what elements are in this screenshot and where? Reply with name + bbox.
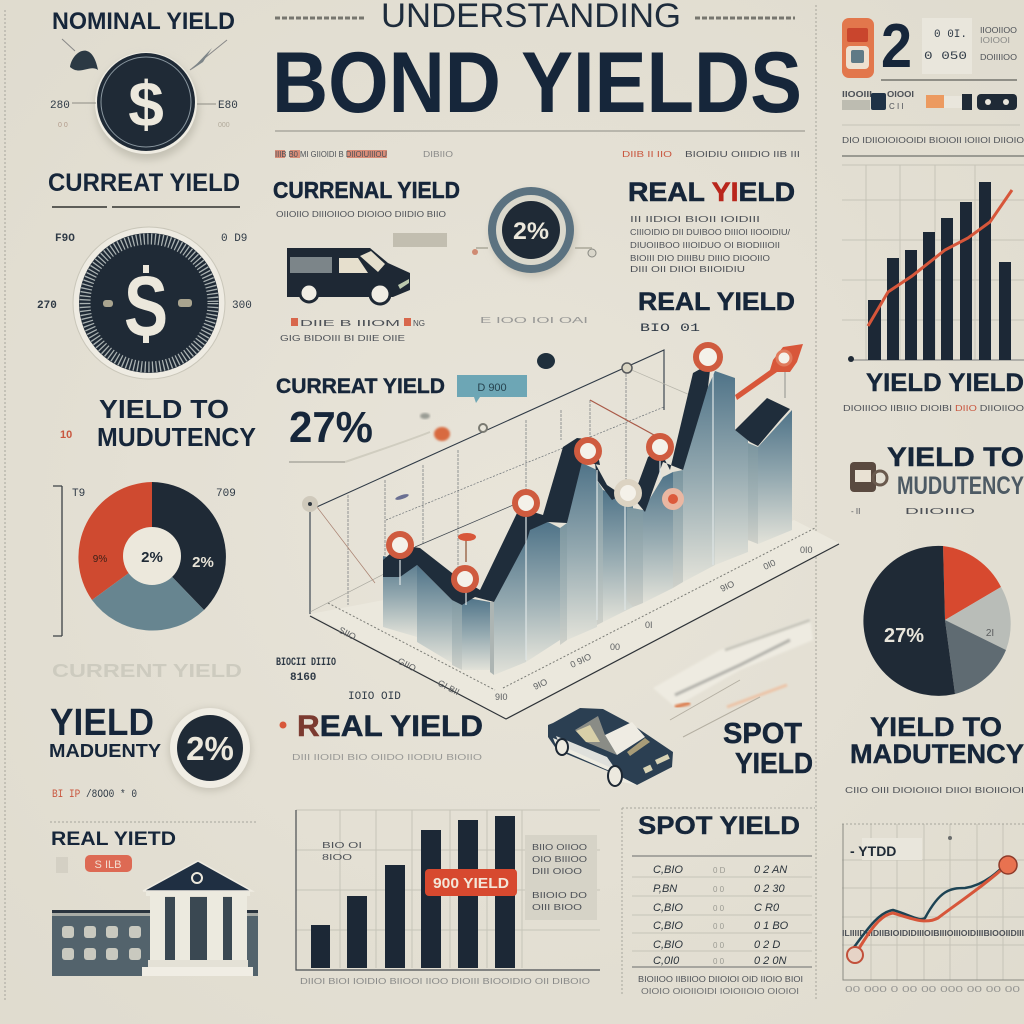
heading: spot yield: SPOT — [723, 718, 802, 750]
panel: spot yield table: P,BN — [653, 883, 677, 895]
status row — [842, 90, 1017, 111]
panel: current nominal yield with van: CURRENAL YIELD — [273, 177, 460, 203]
subtitle text rows: IIIB B0 MI GIIOIDI B DIIOIUIIIOU — [275, 150, 387, 159]
heading: real yield bottom — [280, 710, 483, 762]
subtitle text rows: DIBIIO — [423, 150, 453, 159]
chart axis labels: 0I0 — [800, 545, 813, 555]
panel: bar chart bottom — [296, 810, 600, 986]
panel: spot yield table: OIOIO OIOIIOIDI IOIOIIOIO OIOIOI — [641, 987, 799, 996]
panel: real yield text: DIII OII DIIOI BIIOIDIU — [630, 265, 745, 274]
panel: spot yield table — [622, 808, 815, 996]
icon: percent badge — [169, 708, 251, 791]
icon: van — [287, 248, 410, 304]
small note labels — [276, 657, 401, 703]
panel: spot yield table: C,BIO — [653, 939, 683, 951]
chart axis labels — [337, 545, 813, 702]
panel: current nominal yield with van: OIIOIIO DIIIOIIOO DIOIOO DIIDIO BIIO — [276, 210, 446, 219]
red label: 900 YIELD — [433, 875, 509, 892]
chart axis labels: SIIO — [337, 625, 358, 642]
bars — [868, 182, 1011, 360]
panel: current nominal yield with van: DIIE B IIIOM — [300, 319, 401, 328]
panel: spot yield table: C,BIO — [653, 864, 683, 876]
subtitle text rows: DIIB II IIO — [622, 150, 672, 159]
heading: spot yield — [723, 718, 813, 780]
panel: current yield dial — [37, 169, 252, 379]
title: BOND YIELDS — [272, 35, 802, 131]
panel: current yield 27%: 27% — [289, 403, 373, 452]
panel: top right stat — [842, 12, 1024, 156]
chart axis labels: 9I0 — [495, 692, 508, 702]
title — [272, 0, 802, 131]
panel: nominal yield: 280 — [50, 100, 70, 112]
panel: yield to maturity right: DIIOIIIO — [905, 507, 975, 516]
panel: real yield text — [628, 177, 795, 274]
status row: C I I — [889, 102, 904, 111]
trend line — [868, 190, 1012, 326]
pin stems — [400, 370, 713, 660]
chart axis labels: GI BII — [436, 678, 461, 697]
panel: bar chart bottom: 8IOO — [322, 853, 352, 862]
panel: spot yield table: C R0 — [754, 902, 780, 914]
bars — [311, 816, 515, 968]
panel: current yield 27%: CURREAT YIELD — [276, 375, 445, 398]
panel: spot yield table: BIOIIOO IIBIIOO DIIOIOI OID IIOIO BIOI — [638, 975, 803, 984]
panel: current yield dial: 300 — [232, 300, 252, 312]
panel: bar chart bottom: BIO OI — [322, 841, 362, 850]
panel: yield to maturity pie: YIELD TO — [99, 394, 229, 424]
panel: top right stat: 2 — [881, 12, 912, 81]
panel: spot yield table: SPOT YIELD — [638, 812, 800, 840]
panel: current nominal yield with van: GIG BIDOIII BI DIIE OIIE — [280, 334, 405, 343]
panel: yield to maturity right: - II — [851, 507, 860, 516]
panel: real yield second — [638, 288, 795, 335]
panel: spot yield table: 0 0 — [713, 885, 725, 894]
status row: IIOOIII — [842, 90, 872, 99]
tag: D 900 — [477, 382, 507, 394]
subtitle text rows: BIOIDIU OIIIDIO IIB III — [685, 150, 800, 159]
panel: bar chart bottom: BIIOIO DO — [532, 891, 587, 900]
heading: yield to maturity lower right: CIIO OIII DIOIOIIOI DIIOI BIOIIOIOI — [845, 786, 1024, 795]
panel: nominal yield: NOMINAL YIELD — [52, 8, 235, 35]
panel: YTD line chart: - YTDD — [850, 843, 896, 859]
panel: YTD line chart — [842, 824, 1024, 994]
heading: spot yield: YIELD — [735, 748, 813, 780]
red note — [85, 855, 132, 872]
chart axis labels: 9IO — [719, 579, 736, 594]
panel: yield to maturity pie — [53, 394, 256, 636]
pie chart right: 2I — [986, 628, 994, 639]
heading: yield to maturity lower right: YIELD TO — [870, 712, 1002, 742]
status row: OIOOI — [887, 90, 914, 99]
chart bars — [383, 365, 792, 675]
heading: real yield bottom: REAL YIELD — [297, 710, 483, 743]
panel: bar chart bottom: BIIO OIIOO — [532, 843, 587, 852]
panel: current yield dial: F9O — [55, 233, 75, 245]
panel: real yield text: BIOIII DIO DIIIBU DIIIO DIOOIIO — [630, 254, 770, 263]
pie chart: 9% — [93, 554, 107, 565]
panel: bar chart bottom: OIII BIOO — [532, 903, 582, 912]
icon: dollar coin: $ — [128, 68, 164, 140]
panel: spot yield table: C,0I0 — [653, 955, 680, 967]
panel: spot yield table: C,BIO — [653, 902, 683, 914]
panel: spot yield table: 0 2 AN — [754, 864, 787, 876]
chart grid — [310, 350, 690, 614]
panel: right bar chart: DIOIIIOO IIBIIO DIOIBI DIIO DIIOIIOO — [843, 404, 1024, 413]
panel: current nominal yield with van: NG — [413, 319, 425, 328]
pie chart right: 27% — [884, 625, 924, 647]
icon: dollar dial: S — [124, 259, 168, 353]
chart axis labels: 0 9IO — [569, 651, 593, 670]
panel: top right stat: DIO IDIIOIOIOOIDI BIOIOII IOIIOI DIIOIO — [842, 136, 1024, 145]
panel: current yield 27% — [276, 353, 555, 462]
panel: spot yield table: 0 0 — [713, 957, 725, 966]
panel: yield to maturity pie: 10 — [60, 429, 72, 441]
panel: yield maturity badge: YIELD — [50, 702, 154, 744]
chart floor — [310, 520, 839, 718]
panel: bar chart bottom: DIIOI BIOI IOIDIO BIIOOI IIOO DIOIII BIOOIDIO OII DIBOIO — [300, 977, 590, 986]
panel: current yield dial: 270 — [37, 300, 57, 312]
pie chart — [78, 482, 226, 631]
icon: dollar coin — [95, 52, 199, 160]
heading: yield to maturity lower right — [845, 712, 1024, 795]
panel: nominal yield: 000 — [218, 122, 230, 129]
panel: spot yield table: 0 D — [713, 866, 726, 875]
pie chart: 2% — [192, 554, 214, 571]
small note labels: IOIO OID — [348, 691, 401, 703]
panel: bar chart bottom: OIO BIIIOO — [532, 855, 587, 864]
tag — [457, 375, 527, 403]
chart axis labels: 0I0 — [762, 557, 777, 572]
icon: orange gauge — [842, 18, 874, 78]
panel: current nominal yield with van: E IOO IOI OAI — [480, 316, 588, 325]
panel: current nominal yield with van — [273, 177, 596, 343]
chart axis labels: 9IO — [532, 677, 549, 692]
panel: right bar chart: YIELD YIELD — [866, 369, 1024, 397]
panel: nominal yield — [50, 8, 238, 160]
heading: yield to maturity lower right: MADUTENCY — [850, 739, 1024, 769]
pie chart right — [863, 546, 1011, 696]
panel: spot yield table: 0 0 — [713, 922, 725, 931]
red note: S ILB — [95, 859, 121, 871]
panel: real yield building — [50, 822, 258, 976]
panel: top right stat: IOIOOI — [980, 36, 1010, 45]
panel: current yield dial: CURREAT YIELD — [48, 169, 240, 197]
icon: percent badge: 2% — [186, 730, 234, 767]
panel: spot yield table: 0 2 30 — [754, 883, 785, 895]
panel: nominal yield: E80 — [218, 100, 238, 112]
panel: real yield second: REAL YIELD — [638, 288, 795, 316]
panel: yield to maturity right: YIELD TO — [887, 442, 1024, 472]
panel: real yield text: III IIDIOI BIOII IOIDIII — [630, 215, 760, 224]
panel: top right stat: 0 050 — [924, 51, 967, 63]
chart axis labels: 0I — [645, 620, 653, 630]
panel: yield maturity badge — [49, 702, 251, 801]
panel: yield to maturity pie: MUDUTENCY — [97, 422, 256, 452]
panel: real yield text: REAL YIELD — [628, 177, 795, 207]
brush decoration — [653, 618, 813, 737]
panel: spot yield table: 0 0 — [713, 904, 725, 913]
panel: yield maturity badge: BI IP /8OO0 * 0 — [52, 789, 137, 801]
panel: nominal yield: 0 0 — [58, 122, 68, 129]
faded heading: current yield: CURRENT YIELD — [52, 661, 242, 681]
chart ribbon — [383, 368, 790, 605]
panel: yield maturity badge: MADUENTY — [49, 741, 161, 761]
red label — [425, 869, 517, 896]
panel: yield to maturity pie: T9 — [72, 488, 85, 500]
icon: car — [548, 708, 673, 786]
panel: top right stat: IIOOIIOO — [980, 26, 1017, 35]
panel: spot yield table: C,BIO — [653, 920, 683, 932]
chart axis labels: GIIO — [396, 656, 418, 673]
panel: YTD line chart: 00 000 0 00 00 000 00 00 00 — [845, 985, 1021, 994]
panel: yield to maturity right — [850, 442, 1024, 516]
pie chart: 2% — [141, 549, 163, 566]
icon: mug — [850, 462, 887, 492]
chart axis labels: 00 — [610, 642, 620, 652]
chart markers — [305, 345, 791, 590]
chart: 3D yield area chart — [305, 344, 839, 719]
heading: real yield bottom: DIII IIOIDI BIO OIIDO IIODIU BIOIIO — [292, 753, 482, 762]
panel: right bar chart — [842, 165, 1024, 413]
panel: YTD line chart: ILIIIIDIIIDIIBIOIDIDIIIOIBIIIOIIIOIDIIIBIOOIIDIII — [842, 929, 1024, 938]
small note labels: BIOCII DIIIO — [276, 657, 336, 669]
panel: top right stat: DOIIIIOO — [980, 53, 1017, 62]
icon: bank building — [52, 861, 258, 976]
icon: dollar dial — [73, 227, 225, 379]
panel: real yield text: DIUOIIBOO IIIOIDUO OI BIODIIIOII — [630, 241, 780, 250]
panel: real yield second: BIO 01 — [640, 323, 701, 335]
small note labels: 8160 — [290, 672, 316, 684]
panel: spot yield table: 0 2 D — [754, 939, 780, 951]
icon: percent dial: 2% — [513, 218, 549, 245]
subtitle text rows — [275, 131, 805, 159]
panel: yield to maturity pie: 709 — [216, 488, 236, 500]
panel: spot yield table: 0 0 — [713, 941, 725, 950]
panel: bar chart bottom: DIII OIOO — [532, 867, 582, 876]
panel: real yield text: CIIIOIDIO DII DUIBOO DIIIOI IIOOIDIU/ — [630, 228, 791, 237]
panel: current yield dial: 0 D9 — [221, 233, 247, 245]
icon: percent dial — [472, 187, 596, 277]
panel: spot yield table: 0 1 BO — [754, 920, 789, 932]
panel: top right stat: 0 0I. — [934, 29, 967, 41]
panel: spot yield table: 0 2 0N — [754, 955, 786, 967]
chart arrow — [735, 344, 803, 400]
panel: real yield building: REAL YIETD — [51, 829, 176, 850]
